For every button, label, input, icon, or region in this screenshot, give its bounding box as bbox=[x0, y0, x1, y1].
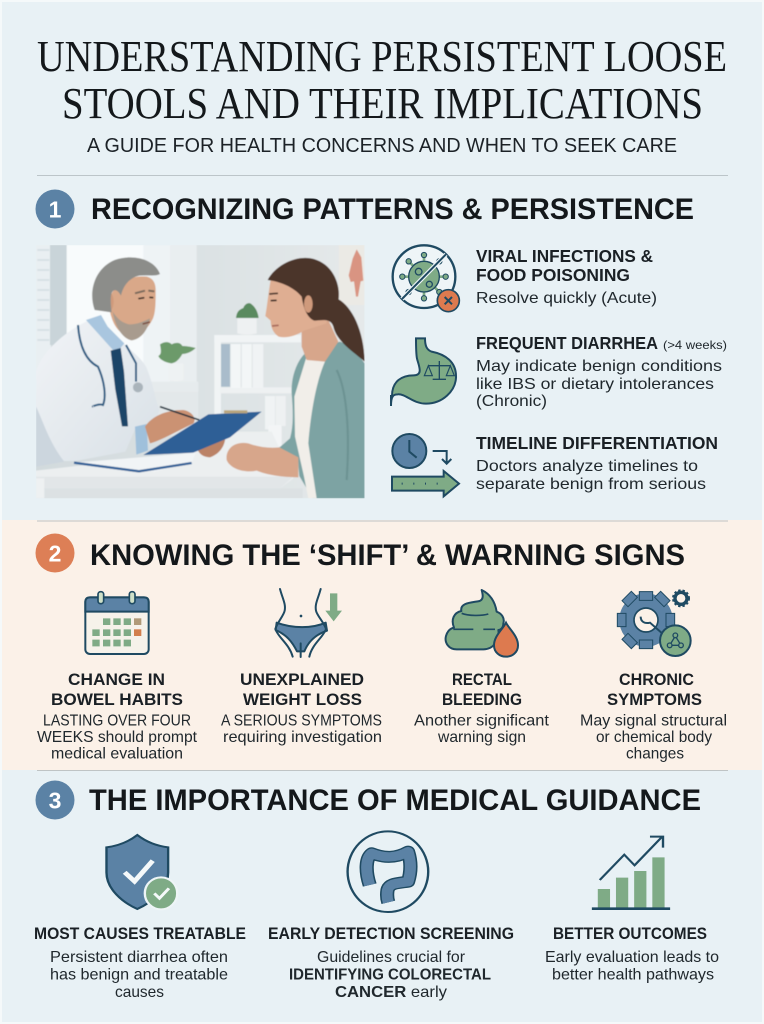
icon: rising bar chart bbox=[592, 837, 670, 909]
icon: calendar bbox=[85, 592, 149, 654]
panel: section 2 background bbox=[2, 520, 762, 770]
warning sign: unexplained weight loss bbox=[221, 589, 382, 746]
guidance: better outcomes: Early evaluation leads to bbox=[545, 949, 719, 966]
woman arm and hands bbox=[227, 443, 298, 477]
section 2 heading: 2 bbox=[49, 540, 61, 566]
woman hair bbox=[268, 258, 365, 362]
warning sign: unexplained weight loss: UNEXPLAINED bbox=[240, 671, 364, 689]
guidance: better outcomes bbox=[545, 837, 719, 984]
warning sign: chronic symptoms: SYMPTOMS bbox=[607, 691, 702, 709]
guidance: early detection screening: Guidelines crucial for bbox=[317, 949, 466, 966]
warning sign: change in bowel habits bbox=[37, 592, 198, 762]
list item: viral infections: VIRAL INFECTIONS & bbox=[476, 246, 653, 266]
guidance: most causes treatable: causes bbox=[115, 984, 164, 1001]
woman body bbox=[279, 342, 365, 498]
guidance: better outcomes: better health pathways bbox=[552, 966, 714, 984]
doctor coat bbox=[36, 318, 159, 461]
icon: crossed virus bbox=[393, 245, 459, 312]
guidance: early detection screening: CANCER early bbox=[335, 984, 447, 1001]
section 2 heading: KNOWING THE ‘SHIFT’ & WARNING SIGNS bbox=[90, 539, 685, 572]
guidance: better outcomes: BETTER OUTCOMES bbox=[553, 925, 707, 943]
guidance: most causes treatable: MOST CAUSES TREATABLE bbox=[34, 925, 246, 943]
warning sign: chronic symptoms: changes bbox=[626, 746, 684, 762]
warning sign: change in bowel habits: medical evaluation bbox=[51, 746, 183, 762]
photo: doctor consulting with patient bbox=[36, 245, 365, 498]
guidance: most causes treatable: Persistent diarrhea often bbox=[50, 949, 228, 966]
panel: section 3 background bbox=[2, 770, 762, 1022]
list item: timeline differentiation: Doctors analyze timelines to bbox=[476, 458, 698, 475]
icon: gears and molecule bbox=[617, 590, 691, 656]
warning sign: chronic symptoms: CHRONIC bbox=[619, 671, 694, 689]
list item: viral infections: FOOD POISONING bbox=[476, 265, 630, 285]
icon: shield with check bbox=[106, 835, 177, 909]
guidance: early detection screening: IDENTIFYING COLORECTAL bbox=[289, 966, 491, 984]
warning sign: change in bowel habits: LASTING OVER FOUR bbox=[43, 712, 191, 730]
list item: frequent diarrhea bbox=[391, 333, 727, 410]
warning sign: change in bowel habits: BOWEL HABITS bbox=[51, 691, 183, 709]
warning sign: unexplained weight loss: A SERIOUS SYMPTOMS bbox=[221, 712, 382, 730]
warning sign: rectal bleeding bbox=[414, 590, 550, 746]
section 1 heading: RECOGNIZING PATTERNS & PERSISTENCE bbox=[91, 193, 694, 226]
title bbox=[37, 32, 727, 128]
list item: frequent diarrhea: (Chronic) bbox=[476, 393, 547, 410]
warning sign: rectal bleeding: RECTAL bbox=[452, 671, 512, 689]
warning sign: chronic symptoms bbox=[580, 590, 727, 762]
list item: frequent diarrhea: like IBS or dietary intolerances bbox=[476, 376, 714, 393]
list item: timeline differentiation bbox=[392, 433, 718, 496]
icon: colon in circle bbox=[348, 831, 428, 912]
list item: frequent diarrhea: FREQUENT DIARRHEA bbox=[476, 333, 658, 353]
icon: clock and timeline arrow bbox=[392, 434, 459, 496]
guidance: early detection screening: EARLY DETECTION SCREENING bbox=[268, 925, 514, 943]
warning sign: rectal bleeding: warning sign bbox=[437, 729, 526, 746]
icon: stool with blood drop bbox=[446, 590, 518, 657]
doctor head bbox=[110, 276, 156, 338]
warning sign: rectal bleeding: Another significant bbox=[414, 712, 550, 730]
guidance: early detection screening bbox=[268, 831, 514, 1001]
icon: waist with down arrow bbox=[275, 589, 342, 657]
warning sign: rectal bleeding: BLEEDING bbox=[442, 691, 522, 709]
doctor hands and pen bbox=[145, 410, 195, 443]
woman neck and face bbox=[302, 320, 338, 362]
subtitle: A GUIDE FOR HEALTH CONCERNS AND WHEN TO SEEK CARE bbox=[87, 135, 677, 157]
list item: frequent diarrhea: (>4 weeks) bbox=[663, 338, 727, 352]
icon: stomach with scale bbox=[391, 338, 456, 406]
guidance: most causes treatable: has benign and treatable bbox=[50, 966, 228, 984]
section 1 heading: 1 bbox=[49, 196, 62, 222]
clipboard bbox=[143, 412, 262, 455]
warning sign: unexplained weight loss: WEIGHT LOSS bbox=[243, 691, 362, 709]
list item: frequent diarrhea: May indicate benign conditions bbox=[476, 358, 722, 375]
warning sign: chronic symptoms: or chemical body bbox=[596, 729, 712, 746]
list item: viral infections: Resolve quickly (Acute) bbox=[476, 290, 657, 307]
section 3 heading: 3 bbox=[49, 788, 61, 814]
section 3 heading: THE IMPORTANCE OF MEDICAL GUIDANCE bbox=[89, 784, 701, 817]
list item: timeline differentiation: TIMELINE DIFFERENTIATION bbox=[476, 433, 718, 453]
list item: timeline differentiation: separate benign from serious bbox=[476, 476, 706, 493]
warning sign: change in bowel habits: WEEKS should prompt bbox=[37, 729, 198, 746]
table bbox=[36, 432, 292, 478]
guidance: most causes treatable bbox=[34, 835, 246, 1001]
warning sign: change in bowel habits: CHANGE IN bbox=[68, 671, 165, 689]
warning sign: chronic symptoms: May signal structural bbox=[580, 712, 727, 730]
warning sign: unexplained weight loss: requiring investigation bbox=[223, 729, 382, 746]
list item: viral infections bbox=[393, 245, 657, 312]
